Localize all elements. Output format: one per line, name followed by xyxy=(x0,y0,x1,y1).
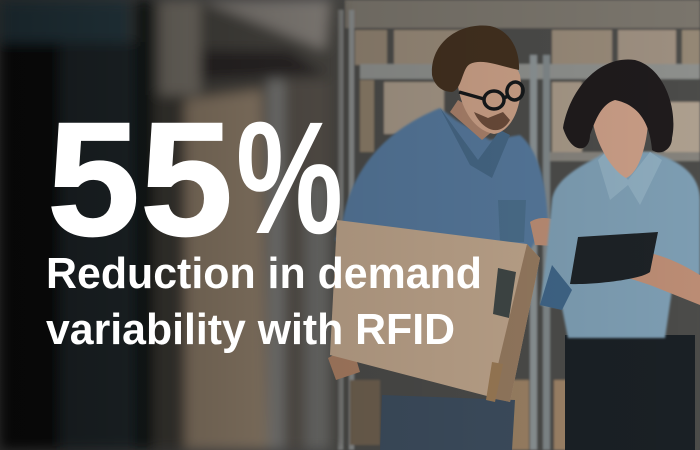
headline: 55%: 55 xyxy=(47,89,233,270)
subheading: reduction in demand variability with RFID xyxy=(46,249,482,354)
woman: shirt xyxy=(540,152,700,338)
man: hair xyxy=(432,25,519,92)
woman: arm and hand xyxy=(605,250,700,305)
woman: neck and face xyxy=(592,94,648,178)
shelves and boxes background xyxy=(330,0,700,450)
man xyxy=(328,25,578,450)
woman: tablet xyxy=(570,232,658,284)
man: glasses xyxy=(459,80,525,109)
subheading: reduction in demand variability with RFID: Reduction in demand xyxy=(46,249,482,298)
headline: 55%: % xyxy=(236,88,343,267)
man: beard xyxy=(474,112,510,130)
woman: trousers xyxy=(565,335,695,450)
subheading: reduction in demand variability with RFID: variability with RFID xyxy=(46,305,455,354)
man: forearm and hand xyxy=(530,218,578,262)
woman: hair xyxy=(563,59,673,152)
woman xyxy=(540,59,700,450)
man: neck and face xyxy=(450,100,500,140)
man: shirt xyxy=(335,108,548,300)
cardboard box xyxy=(330,220,540,402)
woman: wrist cuff xyxy=(540,265,572,310)
man: jeans xyxy=(380,395,515,450)
left blurred foreground shelving xyxy=(0,0,340,450)
headline: 55% xyxy=(47,88,343,270)
